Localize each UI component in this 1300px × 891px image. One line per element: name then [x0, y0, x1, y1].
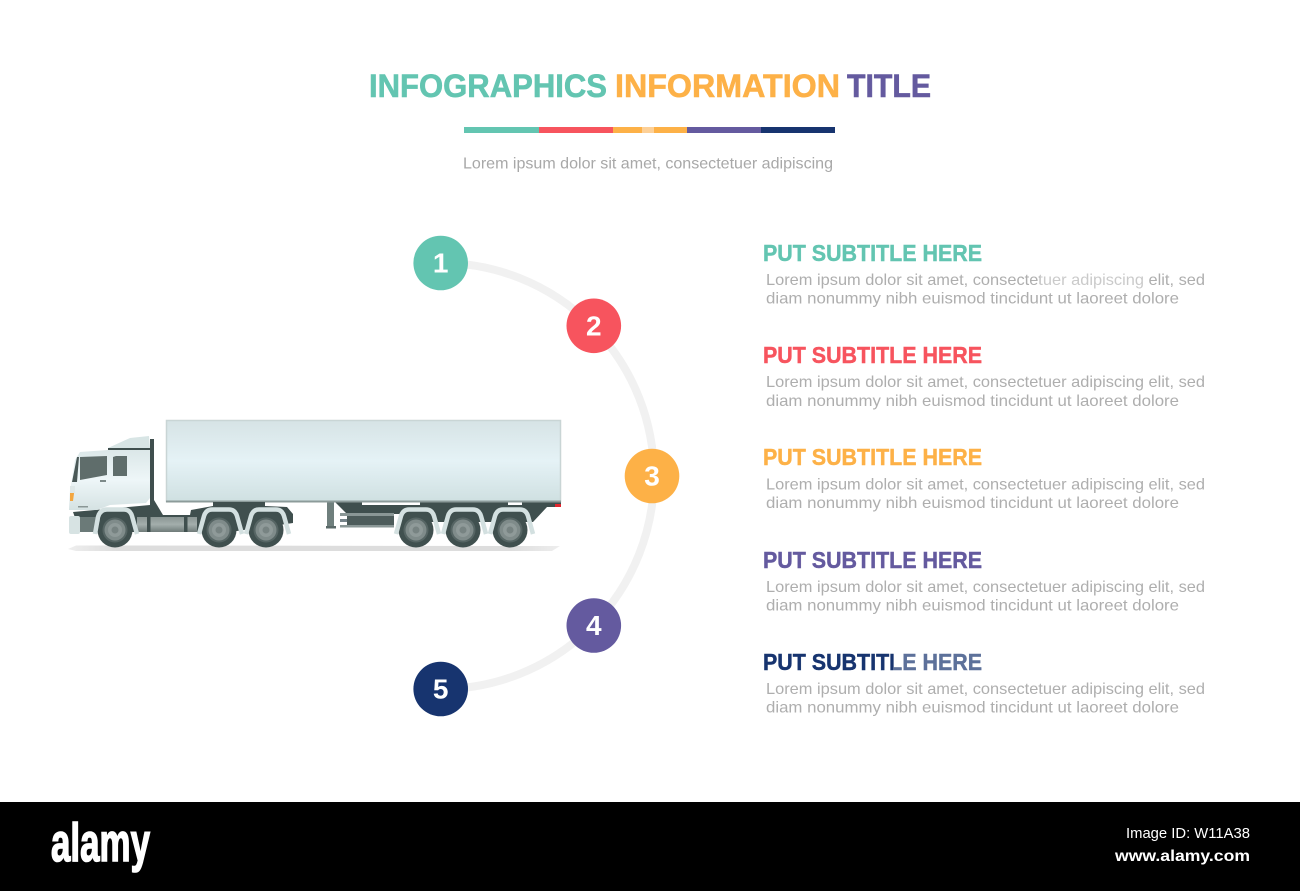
image id: Image ID: W11A38	[1126, 825, 1250, 842]
timeline arc	[441, 263, 654, 689]
tractor chassis	[69, 439, 293, 534]
text block 1	[763, 240, 1205, 308]
text block 1: PUT SUBTITLE HERE	[763, 240, 982, 266]
step 5 marker	[413, 662, 468, 716]
text block 2: diam nonummy nibh euismod tincidunt ut laoreet dolore	[766, 393, 1179, 410]
text block 5: diam nonummy nibh euismod tincidunt ut laoreet dolore	[766, 700, 1179, 716]
wheels	[98, 512, 528, 548]
text block 1: diam nonummy nibh euismod tincidunt ut laoreet dolore	[766, 290, 1179, 308]
text block 3: diam nonummy nibh euismod tincidunt ut laoreet dolore	[766, 495, 1179, 512]
text block 5: PUT SUBTITLE HERE	[763, 649, 982, 675]
alamy logo: alamy	[51, 813, 150, 873]
title: INFORMATION	[615, 68, 840, 104]
text block 4: diam nonummy nibh euismod tincidunt ut laoreet dolore	[766, 598, 1179, 614]
text block 3	[763, 444, 1205, 512]
text block 4: PUT SUBTITLE HERE	[763, 547, 982, 573]
text block 3: PUT SUBTITLE HERE	[763, 444, 982, 470]
cab	[69, 436, 154, 510]
wheel fenders	[95, 510, 533, 534]
truck illustration	[68, 420, 561, 551]
title: INFOGRAPHICS	[369, 68, 607, 104]
footer bar	[0, 802, 1300, 891]
text block 5: Lorem ipsum dolor sit amet, consectetuer adipiscing elit, sed	[766, 681, 1205, 698]
title: TITLE	[847, 68, 931, 104]
text block 4	[763, 547, 1205, 614]
step 1 marker: 1	[433, 248, 448, 278]
title	[369, 68, 931, 104]
text block 4: Lorem ipsum dolor sit amet, consectetuer adipiscing elit, sed	[766, 579, 1205, 596]
step 3 marker: 3	[644, 460, 660, 492]
subtitle: Lorem ipsum dolor sit amet, consectetuer adipiscing	[463, 156, 833, 172]
text block 3: Lorem ipsum dolor sit amet, consectetuer adipiscing elit, sed	[766, 476, 1205, 494]
text block 1: Lorem ipsum dolor sit amet, consectetuer adipiscing elit, sed	[766, 272, 1205, 289]
step 2 marker: 2	[586, 310, 602, 341]
trailer box	[166, 420, 560, 502]
text block 5	[763, 649, 1205, 716]
step 4 marker: 4	[586, 610, 602, 641]
trailer chassis	[326, 501, 561, 528]
text block 2: Lorem ipsum dolor sit amet, consectetuer adipiscing elit, sed	[766, 374, 1205, 391]
ground shadow	[68, 546, 560, 551]
step 1 marker	[413, 236, 468, 290]
text block 2: PUT SUBTITLE HERE	[763, 342, 982, 368]
step 3 marker	[625, 449, 679, 503]
step 4 marker	[566, 598, 621, 653]
text block 2	[763, 342, 1205, 410]
step 5 marker: 5	[433, 674, 448, 704]
title colour bar	[464, 127, 835, 133]
step 2 marker	[566, 298, 621, 353]
website: www.alamy.com	[1114, 848, 1250, 865]
